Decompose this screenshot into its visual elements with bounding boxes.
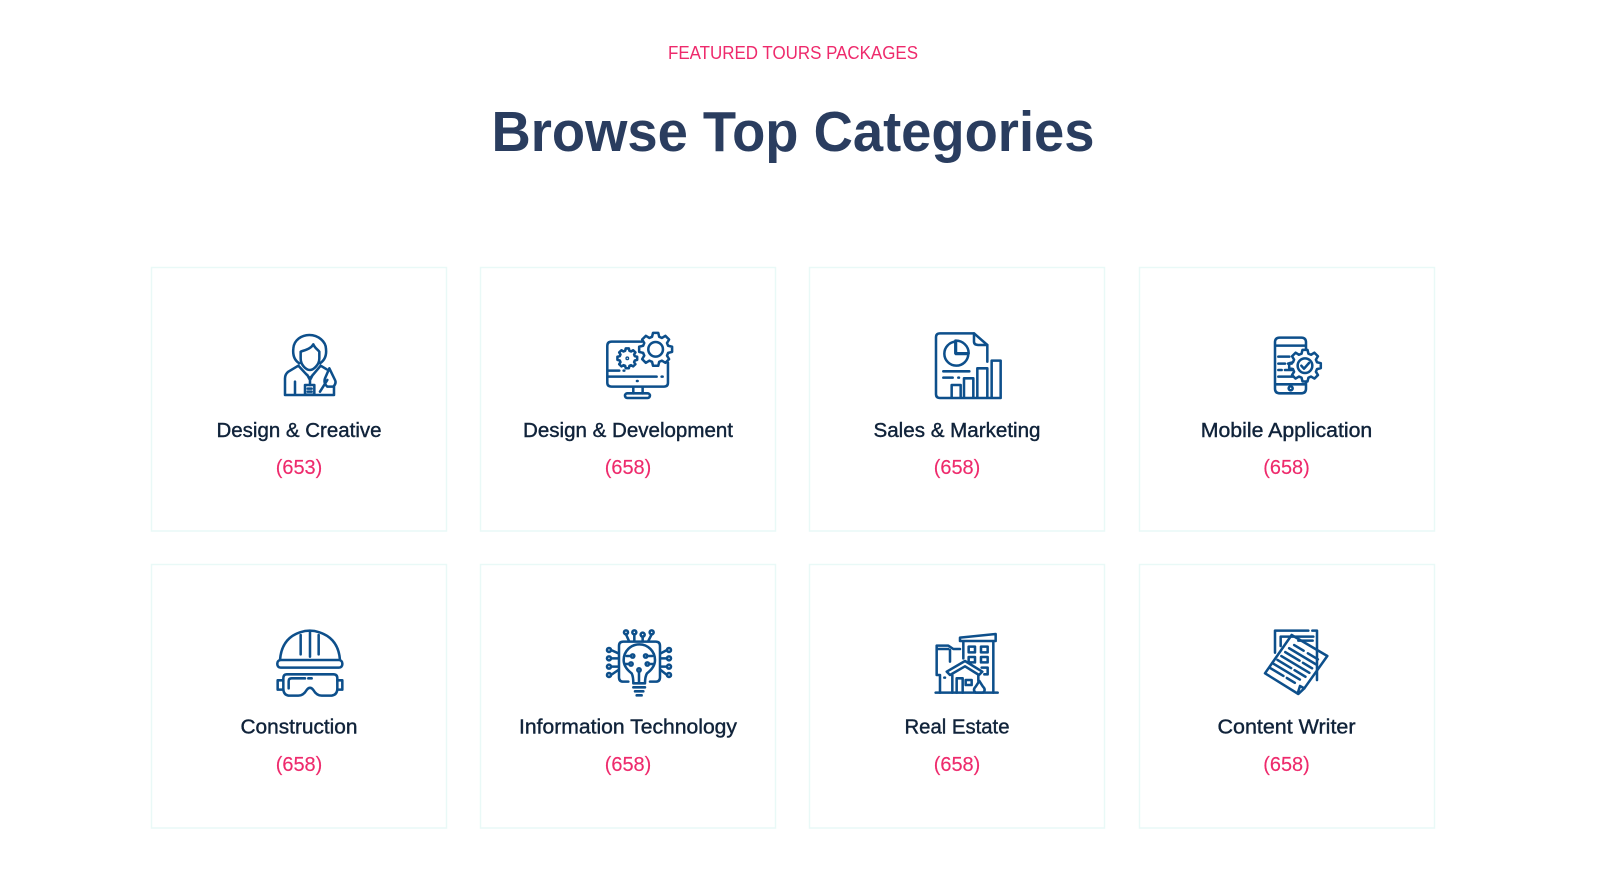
label: Design & Creative — [216, 419, 382, 442]
panel: Real Estate — [810, 564, 1104, 828]
count: (658) — [1263, 456, 1310, 479]
title: Browse Top Categories — [492, 100, 1094, 164]
label: Construction — [240, 716, 358, 738]
count: (658) — [934, 753, 980, 776]
icon: circuit light bulb — [607, 630, 671, 695]
count: (658) — [605, 753, 651, 776]
label: Design & Development — [523, 419, 733, 442]
icon: report with charts — [936, 333, 1001, 398]
panel: Sales & Marketing — [810, 268, 1104, 531]
label: Sales & Marketing — [874, 419, 1040, 442]
label: Information Technology — [519, 716, 738, 738]
icon: designer person — [285, 335, 336, 395]
icon: monitor with gears — [607, 333, 672, 398]
label: Mobile Application — [1201, 419, 1372, 442]
label: Content Writer — [1218, 716, 1356, 738]
panel: Design & Creative — [152, 268, 446, 531]
count: (658) — [276, 753, 322, 776]
panel: Design & Development — [480, 268, 776, 531]
icon: helmet and goggles — [277, 631, 342, 696]
label: Real Estate — [904, 716, 1010, 738]
panel: Mobile Application — [1140, 268, 1434, 531]
panel: Information Technology — [480, 564, 776, 828]
count: (653) — [276, 456, 322, 479]
eyebrow heading: FEATURED TOURS PACKAGES — [668, 42, 918, 63]
icon: buildings and house — [936, 634, 998, 693]
icon: stacked documents — [1265, 631, 1327, 694]
icon: phone with gear — [1275, 338, 1321, 393]
panel: Content Writer — [1140, 564, 1434, 828]
panel: Construction — [152, 564, 446, 828]
count: (658) — [1263, 753, 1310, 776]
count: (658) — [934, 456, 980, 479]
count: (658) — [605, 456, 651, 479]
